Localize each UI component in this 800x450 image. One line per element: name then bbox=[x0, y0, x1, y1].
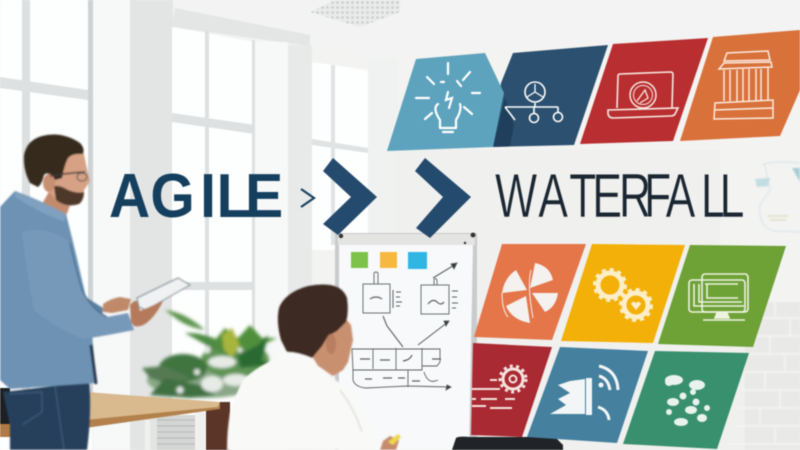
hands bbox=[103, 297, 131, 313]
person: seated man bbox=[227, 285, 401, 450]
panel: orange temple bbox=[680, 30, 800, 141]
panel: yellow gears bbox=[561, 244, 685, 343]
glasses bbox=[50, 172, 85, 176]
arrow: large chevron one bbox=[323, 158, 377, 235]
collar bbox=[15, 191, 66, 222]
top panels bbox=[387, 30, 800, 151]
table bbox=[0, 388, 230, 450]
panel: navy hierarchy bbox=[493, 45, 608, 147]
shirt bbox=[0, 191, 96, 389]
whiteboard bbox=[335, 233, 477, 450]
arm shadow bbox=[70, 243, 107, 317]
panel: green clusters bbox=[623, 351, 749, 449]
tablet bbox=[137, 278, 190, 310]
bottom panels bbox=[471, 244, 786, 449]
board surface bbox=[339, 245, 473, 450]
column two bbox=[255, 42, 312, 450]
ear bbox=[43, 174, 55, 192]
beard bbox=[54, 186, 84, 205]
jeans bbox=[3, 381, 90, 450]
hand-drawn flow diagram bbox=[352, 263, 458, 390]
arrow: small chevron bbox=[301, 189, 314, 207]
hand and marker bbox=[380, 436, 399, 450]
laptop edge bbox=[452, 437, 563, 450]
face and neck bbox=[305, 318, 353, 376]
title: WATERFALL: WATERFALL bbox=[495, 162, 744, 231]
placket bbox=[91, 345, 96, 384]
title: AGILE: AGILE bbox=[109, 161, 283, 231]
hair bbox=[278, 285, 348, 358]
right window bbox=[312, 62, 368, 250]
ceiling bbox=[145, 0, 800, 60]
neck bbox=[42, 190, 72, 216]
panel: red laptop bbox=[580, 38, 708, 144]
hair bbox=[24, 135, 84, 187]
person: presenter with tablet bbox=[0, 135, 190, 450]
sticky notes bbox=[351, 252, 427, 269]
arrow: large chevron two bbox=[415, 158, 471, 238]
middle window bbox=[172, 27, 255, 450]
near arm bbox=[22, 230, 134, 339]
jeans pocket bbox=[10, 386, 64, 450]
wall sketch bbox=[755, 162, 800, 232]
left window bbox=[0, 0, 93, 450]
back wall bbox=[368, 60, 800, 450]
panel: green monitor bbox=[658, 245, 786, 347]
panel: blue signal bbox=[527, 347, 648, 443]
ear bbox=[326, 334, 336, 354]
face bbox=[46, 149, 90, 205]
panel: orange fan bbox=[474, 244, 586, 340]
plant bbox=[142, 310, 277, 398]
far arm bbox=[84, 296, 103, 318]
panel: teal lightbulb bbox=[387, 53, 504, 151]
brick wall bbox=[730, 302, 800, 444]
white shirt bbox=[227, 352, 382, 450]
panel: crimson gear bbox=[471, 343, 552, 437]
column one bbox=[93, 0, 173, 450]
frame bbox=[335, 233, 477, 450]
